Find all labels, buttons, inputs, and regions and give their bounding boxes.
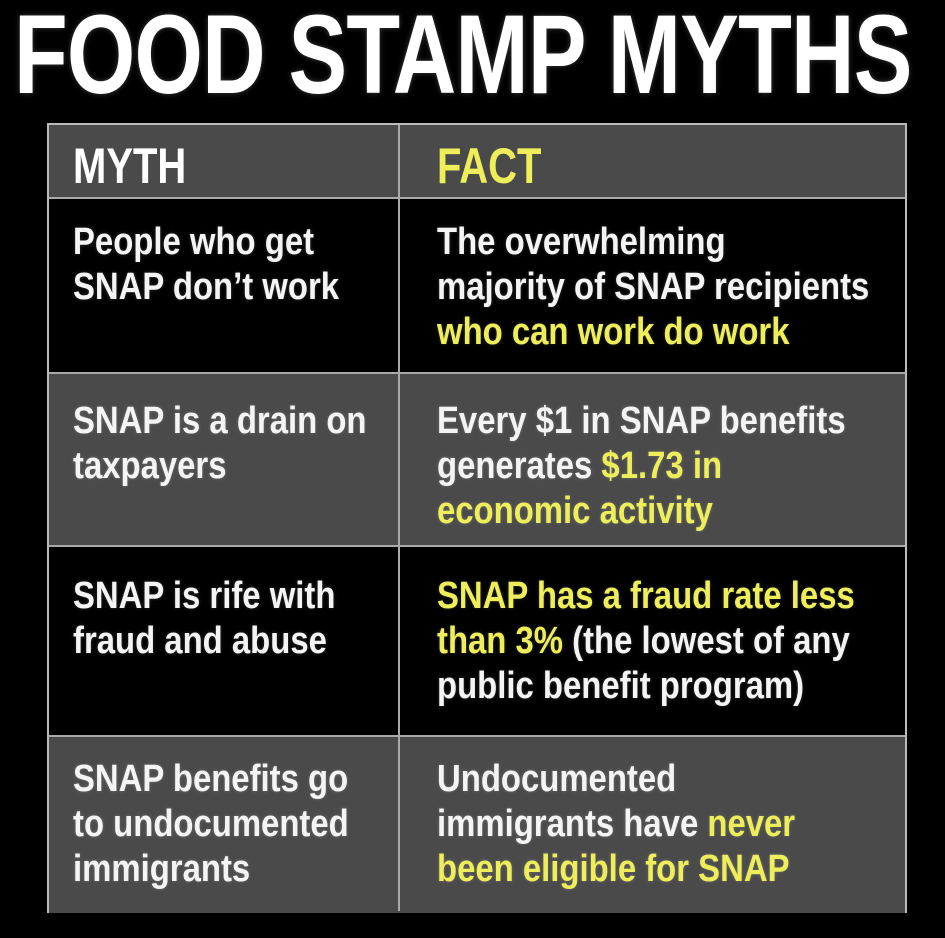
- myth 3: fraud and abuse: [73, 620, 327, 662]
- fact 3: public benefit program): [437, 665, 804, 707]
- header: myth: MYTH: [73, 138, 186, 194]
- row 2 background: [49, 374, 905, 547]
- row 4 background: [49, 737, 905, 913]
- myth 1: SNAP don’t work: [73, 266, 339, 308]
- fact 1: who can work do work: [437, 311, 789, 353]
- table: [47, 123, 907, 913]
- myth 4: SNAP benefits go: [73, 758, 348, 800]
- myth 3: SNAP is rife with: [73, 575, 335, 617]
- fact 4: [437, 758, 796, 890]
- fact 2: [437, 400, 846, 532]
- fact 2: generates $1.73 in: [437, 445, 722, 487]
- myth 4: [72, 758, 349, 890]
- fact 2: Every $1 in SNAP benefits: [437, 400, 846, 442]
- fact 4: Undocumented: [437, 758, 676, 800]
- myth 1: [73, 221, 340, 308]
- header row: [49, 125, 905, 199]
- fact 1: [436, 221, 870, 353]
- fact 1: The overwhelming: [437, 221, 726, 263]
- myth 4: immigrants: [73, 848, 250, 890]
- row 3 background: [49, 547, 905, 737]
- fact 1: majority of SNAP recipients: [437, 266, 869, 308]
- myth 2: taxpayers: [73, 445, 227, 487]
- myth 2: [72, 400, 366, 487]
- myth 2: SNAP is a drain on: [73, 400, 366, 442]
- fact 3: [436, 575, 855, 708]
- fact 3: than 3% (the lowest of any: [437, 620, 850, 662]
- fact 4: been eligible for SNAP: [437, 848, 790, 890]
- fact 4: immigrants have never: [437, 803, 795, 845]
- myth 3: [72, 575, 335, 662]
- myth 1: People who get: [73, 221, 314, 263]
- fact 3: SNAP has a fraud rate less: [437, 575, 855, 617]
- fact 2: economic activity: [437, 490, 713, 532]
- row 1 background: [49, 199, 905, 374]
- header: fact: FACT: [437, 138, 541, 194]
- myth 4: to undocumented: [73, 803, 349, 845]
